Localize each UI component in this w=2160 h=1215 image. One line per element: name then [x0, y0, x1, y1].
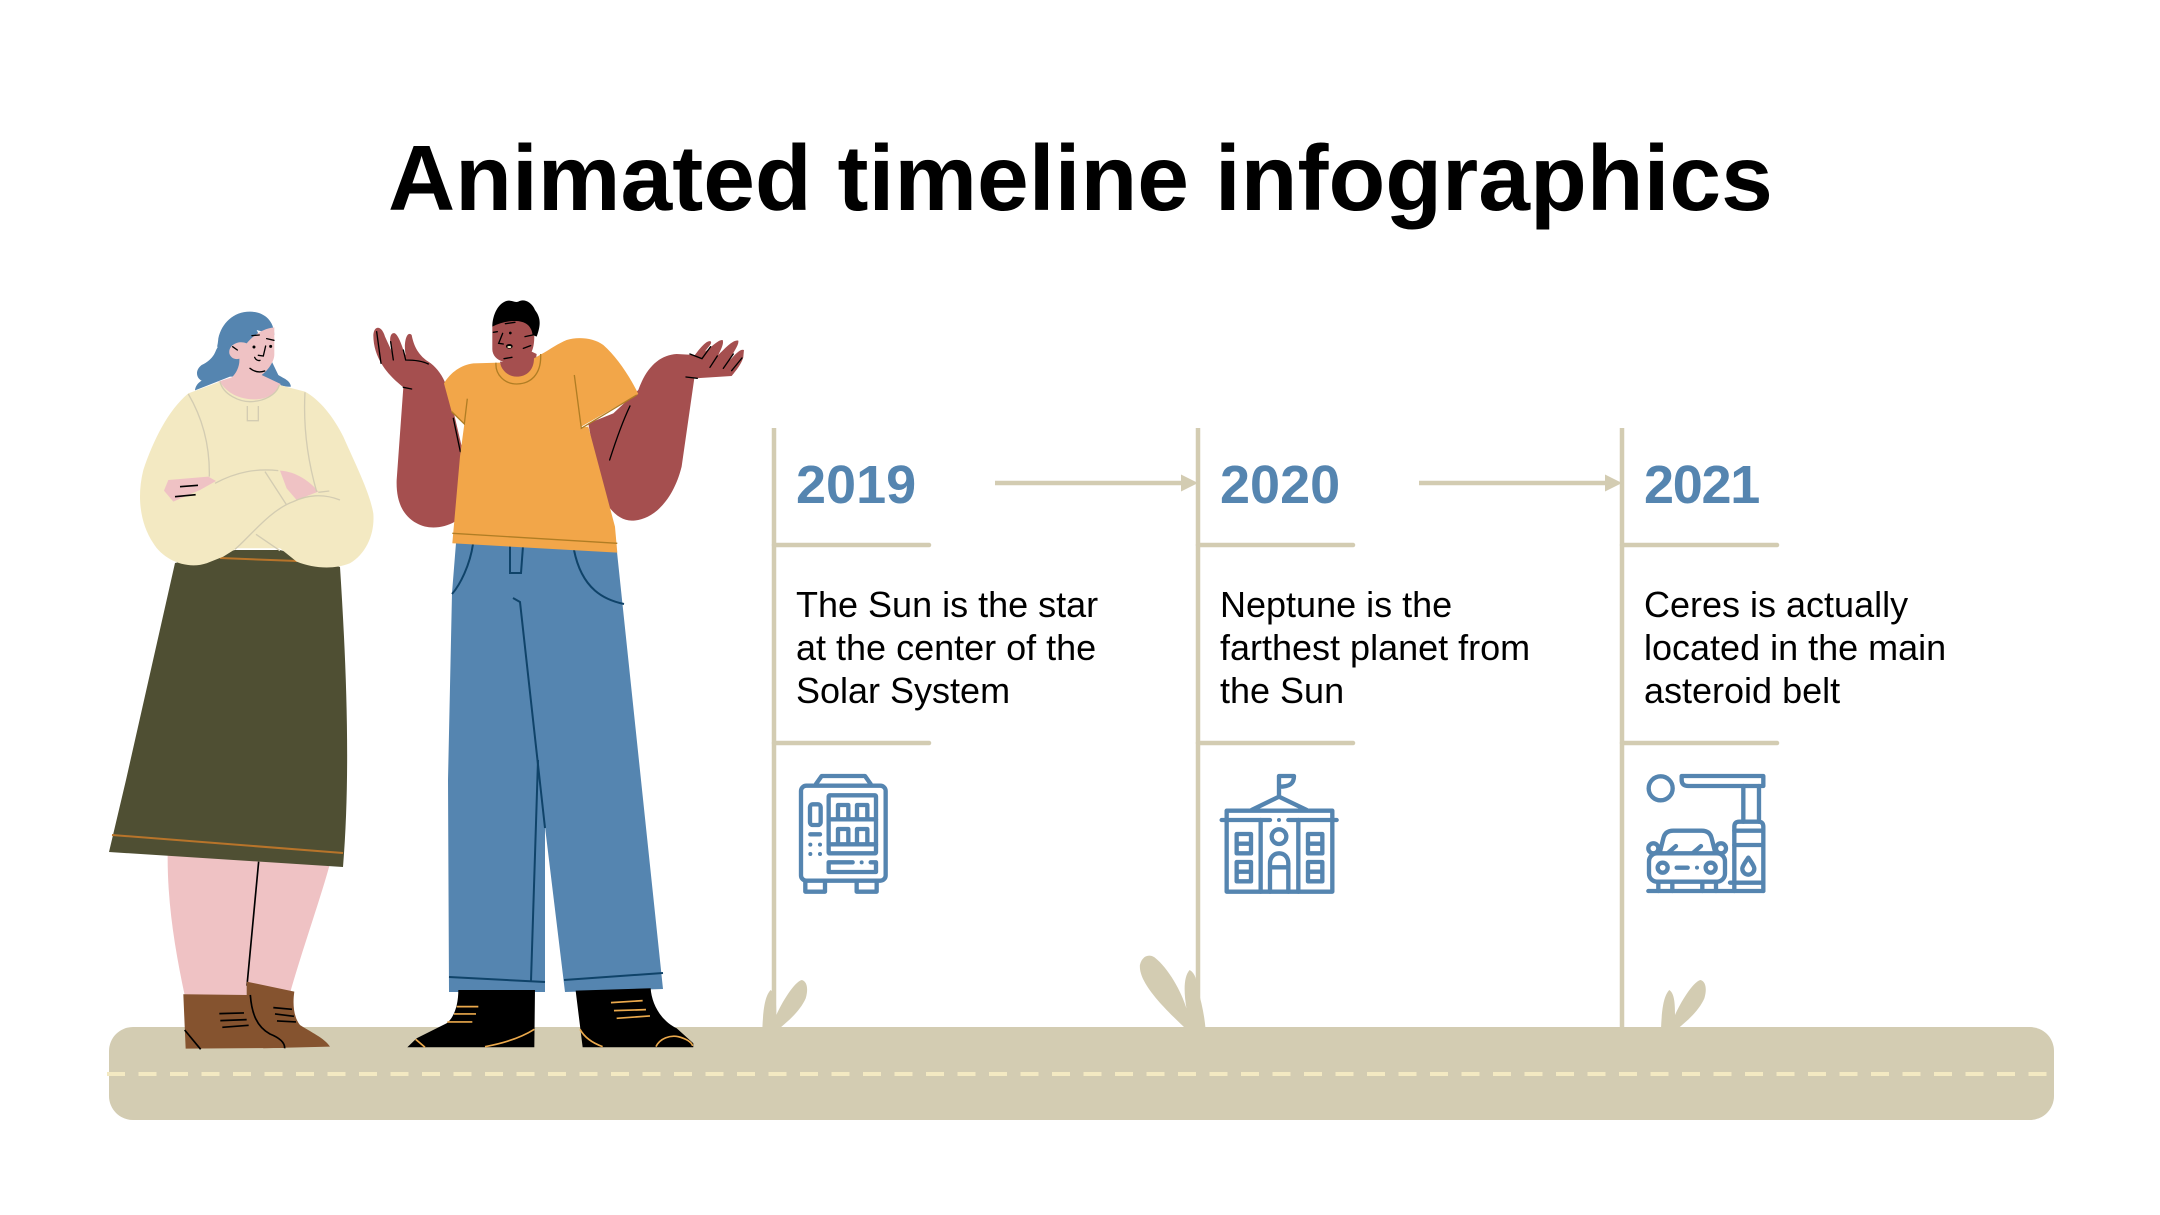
skirt	[109, 550, 347, 867]
legs	[168, 855, 329, 997]
head	[218, 327, 281, 404]
shoes	[407, 988, 693, 1047]
description 2020: the Sun	[1220, 670, 1344, 711]
timeline stem: 2019	[772, 428, 776, 1030]
divider	[1198, 741, 1353, 745]
road	[107, 1027, 2054, 1120]
divider	[1622, 741, 1777, 745]
T-shirt	[444, 338, 638, 553]
trousers	[448, 543, 663, 992]
hair	[195, 312, 291, 390]
divider	[1198, 543, 1353, 547]
milestone 2019	[774, 455, 1198, 892]
description 2021: located in the main	[1644, 627, 1946, 668]
icon: vending machine	[801, 776, 886, 892]
arrow to 2020	[995, 474, 1198, 492]
sweater	[140, 382, 374, 568]
divider	[1622, 543, 1777, 547]
description 2019: Solar System	[796, 670, 1010, 711]
description 2020: Neptune is the	[1220, 584, 1452, 625]
divider	[774, 543, 929, 547]
neck and head	[492, 300, 540, 380]
year 2019: 2019	[796, 455, 916, 515]
arms	[373, 328, 744, 528]
milestone 2020	[1198, 455, 1622, 892]
description 2019: The Sun is the star	[796, 584, 1098, 625]
woman figure	[109, 312, 374, 1049]
timeline stem: 2021	[1620, 428, 1624, 1030]
year 2020: 2020	[1220, 455, 1340, 515]
plant 2	[1140, 956, 1206, 1029]
plant 1	[762, 980, 807, 1029]
year 2021: 2021	[1644, 455, 1759, 515]
man figure	[373, 300, 744, 1047]
divider	[774, 741, 929, 745]
boots	[183, 982, 330, 1049]
icon: gas station	[1648, 776, 1763, 891]
description 2021: Ceres is actually	[1644, 584, 1908, 625]
description 2021: asteroid belt	[1644, 670, 1840, 711]
milestone 2021	[1622, 455, 1946, 891]
description 2020: farthest planet from	[1220, 627, 1530, 668]
icon: government building	[1222, 776, 1337, 892]
title: Animated timeline infographics	[388, 126, 1773, 230]
plant 3	[1661, 980, 1706, 1029]
description 2019: at the center of the	[796, 627, 1096, 668]
arrow to 2021	[1419, 474, 1622, 492]
timeline stem: 2020	[1196, 428, 1200, 1030]
